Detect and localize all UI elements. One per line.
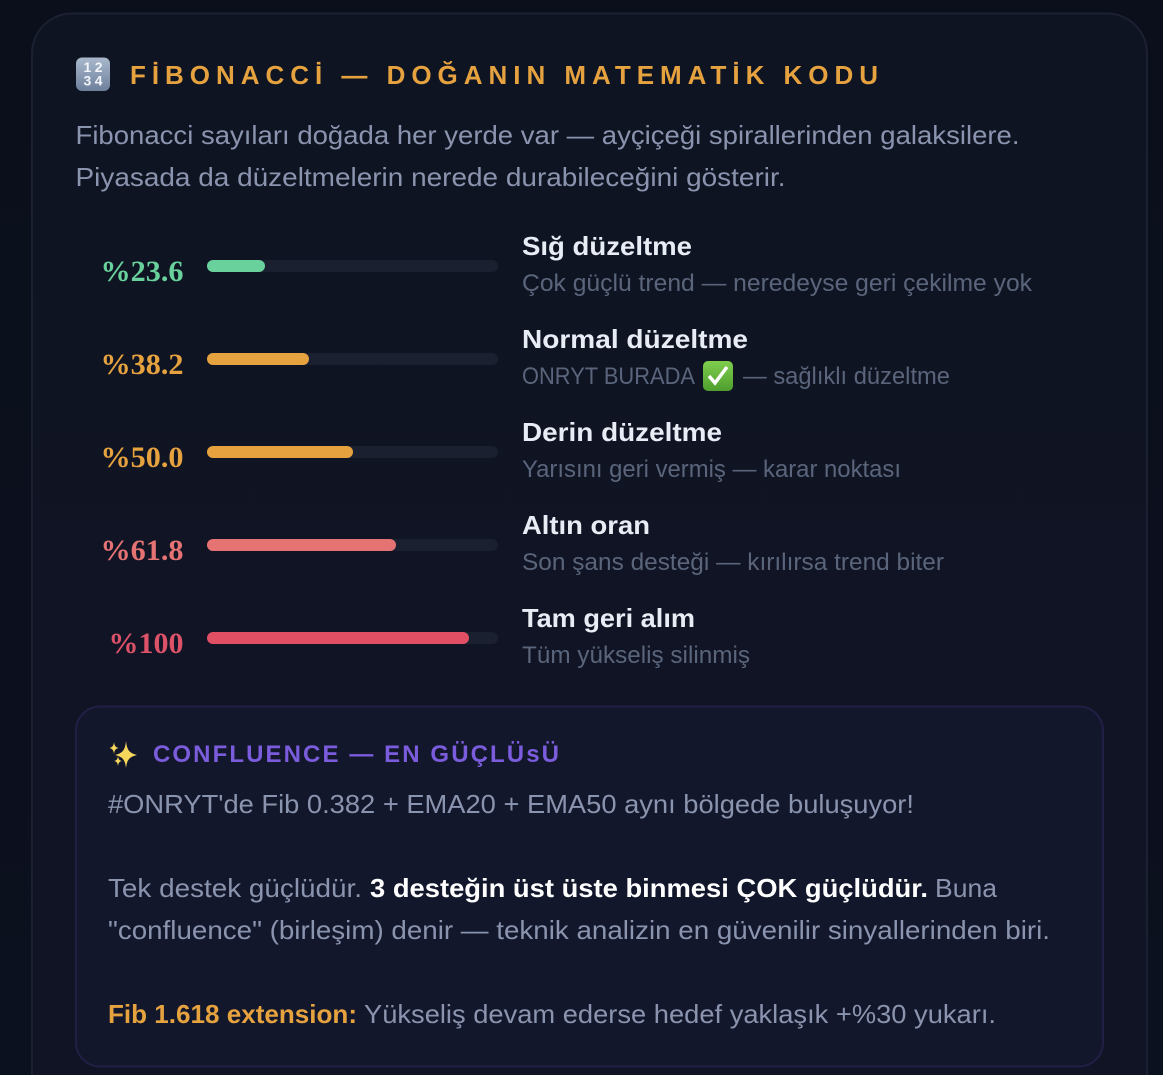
callout text: second paragraph bbox=[108, 873, 1050, 945]
level row: 23.6 bbox=[100, 231, 1033, 297]
callout text: extension target: Fib 1.618 extension: bbox=[108, 999, 357, 1029]
icon: sparkles bbox=[110, 741, 137, 768]
callout heading: CONFLUENCE — EN GÜÇLÜsÜ bbox=[153, 741, 559, 768]
level row: 50.0: %50.0 bbox=[100, 441, 184, 474]
callout text: extension target: Yükseliş devam ederse hedef yaklaşık +%30 yukarı. bbox=[364, 999, 996, 1029]
level row: 38.2: %38.2 bbox=[100, 348, 184, 381]
title: FİBONACCİ — DOĞANIN MATEMATİK KODU bbox=[130, 60, 878, 90]
level row: 38.2 bbox=[100, 324, 950, 391]
intro text: Piyasada da düzeltmelerin nerede durabileceğini gösterir. bbox=[76, 162, 786, 192]
icon: 1234 keycap bbox=[76, 58, 110, 91]
level row: 38.2: Normal düzeltme bbox=[522, 324, 748, 354]
callout text: first line: #ONRYT'de Fib 0.382 + EMA20 + EMA50 aynı bölgede buluşuyor! bbox=[108, 789, 914, 819]
panel: confluence callout bbox=[76, 706, 1103, 1066]
level row: 100: Tüm yükseliş silinmiş bbox=[522, 642, 750, 669]
callout text: second paragraph: 3 desteğin üst üste binmesi ÇOK güçlüdür. bbox=[370, 873, 928, 903]
callout text: second paragraph: Tek destek güçlüdür. bbox=[108, 873, 362, 903]
level row: 100: Tam geri alım bbox=[522, 603, 695, 633]
level row: 38.2: — sağlıklı düzeltme bbox=[743, 363, 950, 390]
level row: 23.6: Sığ düzeltme bbox=[522, 231, 692, 261]
level row: 50.0: Derin düzeltme bbox=[522, 417, 722, 447]
level row: 100 bbox=[108, 603, 750, 669]
level row: 61.8: Altın oran bbox=[522, 510, 650, 540]
icon: 1234 keycap: 34 bbox=[84, 72, 103, 88]
level row: 50.0: Yarısını geri vermiş — karar noktası bbox=[522, 456, 901, 483]
level row: 38.2: ONRYT BURADA bbox=[522, 363, 695, 390]
callout text: extension target bbox=[108, 999, 996, 1029]
level row: 61.8 bbox=[100, 510, 944, 576]
level row: 61.8: %61.8 bbox=[100, 534, 184, 567]
level row: 23.6: %23.6 bbox=[100, 255, 184, 288]
level row: 50.0 bbox=[100, 417, 901, 483]
intro text: Fibonacci sayıları doğada her yerde var — ayçiçeği spirallerinden galaksilere. bbox=[76, 120, 1020, 150]
icon: check mark bbox=[703, 361, 733, 391]
callout text: second paragraph: "confluence" (birleşim) denir — teknik analizin en güvenilir sinyallerinden biri. bbox=[108, 915, 1050, 945]
callout text: second paragraph: Buna bbox=[935, 873, 998, 903]
level row: 100: %100 bbox=[108, 627, 184, 660]
level row: 23.6: Çok güçlü trend — neredeyse geri çekilme yok bbox=[522, 270, 1033, 297]
intro text bbox=[76, 120, 1020, 192]
icon: 1234 keycap: 12 bbox=[84, 59, 103, 75]
level row: 61.8: Son şans desteği — kırılırsa trend biter bbox=[522, 549, 944, 576]
